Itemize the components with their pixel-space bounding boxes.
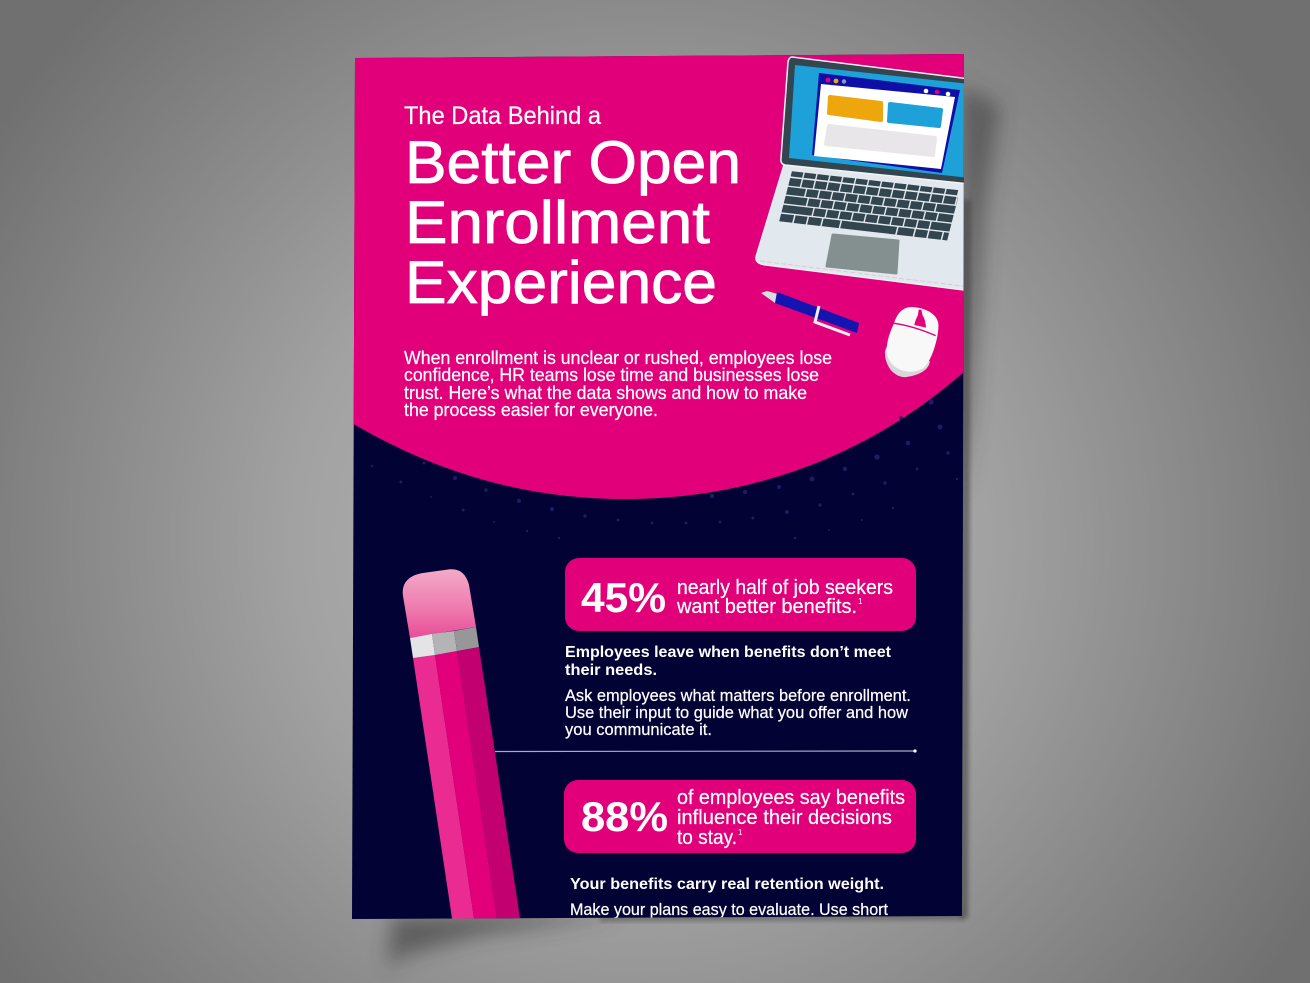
laptop base <box>756 164 970 291</box>
browser window <box>812 73 960 173</box>
touchpad <box>827 235 898 273</box>
title <box>405 129 741 316</box>
pencil body stripes <box>413 655 475 925</box>
pink header panel <box>345 40 975 499</box>
stat description: influence their decisions <box>677 806 892 829</box>
subheading: Employees leave when benefits don’t meet <box>565 644 892 661</box>
stat description: 1 <box>738 828 743 837</box>
poster <box>340 40 980 930</box>
header heading <box>404 102 741 316</box>
intro text: confidence, HR teams lose time and businesses lose <box>404 365 819 385</box>
intro text: the process easier for everyone. <box>404 400 658 420</box>
stat card: 45% <box>565 558 916 631</box>
pen clip <box>815 306 850 335</box>
icon: pen <box>761 291 859 335</box>
stat value: 45% <box>581 574 666 621</box>
intro text: trust. Here’s what the data shows and how to make <box>404 383 807 403</box>
paper shadow <box>388 85 1000 968</box>
kicker: The Data Behind a <box>404 102 601 130</box>
window buttons <box>826 78 950 96</box>
body copy: Use their input to guide what you offer and how <box>565 703 909 722</box>
keyboard <box>780 174 959 237</box>
title: Experience <box>405 249 717 316</box>
icon: mouse <box>885 307 938 377</box>
stat description: nearly half of job seekers <box>677 576 893 599</box>
intro text <box>404 348 832 420</box>
intro text: When enrollment is unclear or rushed, employees lose <box>404 348 832 368</box>
orange card <box>829 97 881 120</box>
title: Enrollment <box>405 189 710 256</box>
pencil eraser <box>403 569 476 638</box>
pencil ferrule <box>410 627 479 658</box>
subheading <box>565 646 891 675</box>
gray card <box>826 126 935 155</box>
icon: laptop <box>756 57 970 291</box>
blue card <box>889 104 941 126</box>
stat description: want better benefits. <box>676 595 857 618</box>
stat description: of employees say benefits <box>677 786 905 809</box>
stat value: 88% <box>581 793 668 840</box>
subheading: Your benefits carry real retention weight. <box>570 876 884 893</box>
navy page background <box>340 40 980 930</box>
stat description: to stay. <box>677 826 737 849</box>
divider line <box>495 749 917 753</box>
body copy: Ask employees what matters before enrollment. <box>565 686 911 705</box>
stat card: 88% <box>564 780 916 853</box>
body copy: you communicate it. <box>565 720 712 739</box>
icon: pencil <box>403 569 521 925</box>
title: Better Open <box>405 129 741 196</box>
subheading: their needs. <box>565 662 657 679</box>
stat description <box>676 578 892 614</box>
body copy: Make your plans easy to evaluate. Use short <box>570 900 888 919</box>
body copy <box>565 686 911 739</box>
stat description <box>677 786 905 849</box>
laptop lid <box>781 57 970 184</box>
laptop screen <box>789 65 970 178</box>
decorative dots <box>371 399 958 539</box>
section text: retention weight <box>570 876 888 919</box>
stat description: 1 <box>858 597 863 606</box>
section text: employees leave <box>565 644 911 739</box>
